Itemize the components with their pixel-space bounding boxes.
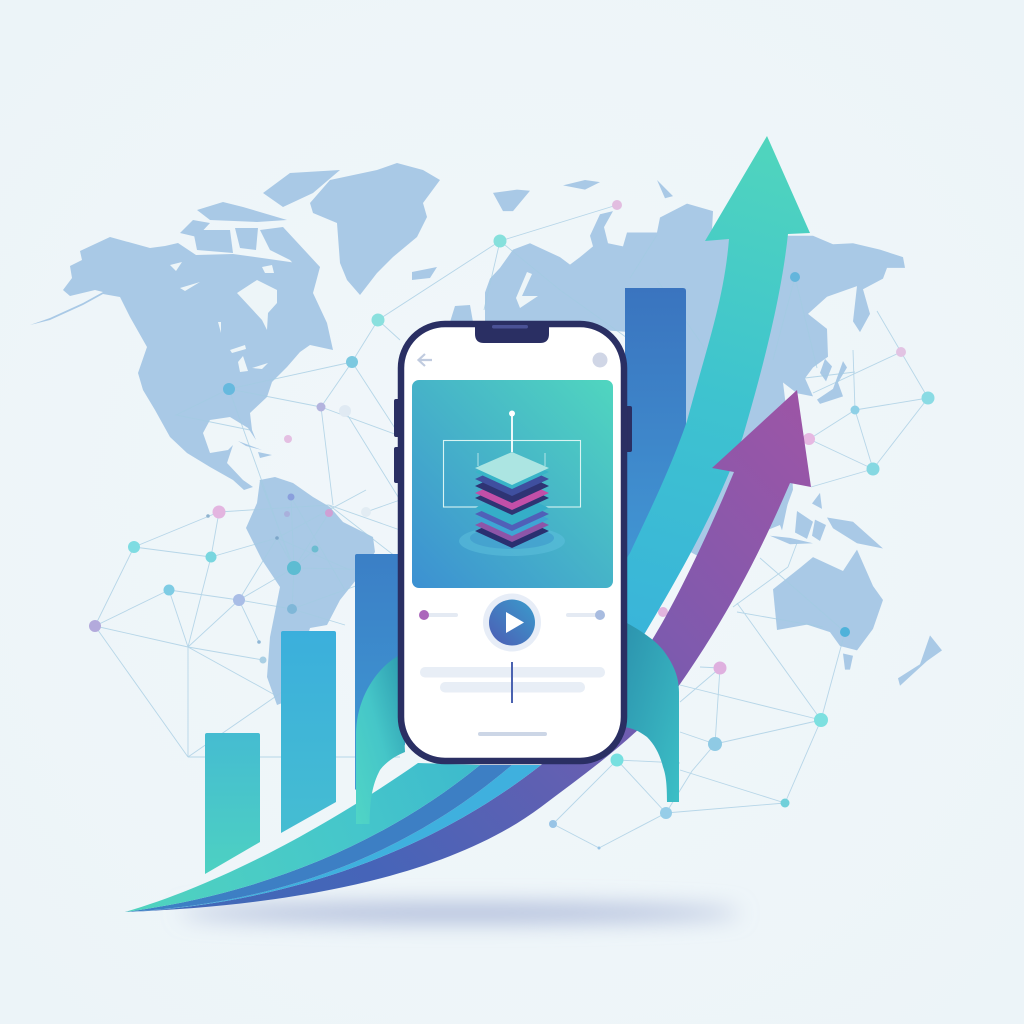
map: Iceland [412, 267, 437, 280]
profile avatar [592, 352, 608, 368]
media panel [412, 380, 613, 588]
bar 1 [205, 733, 260, 874]
left slider [419, 610, 458, 620]
phone notch [475, 324, 549, 343]
map: Hudson Bay, lakes and inland seas [170, 262, 538, 372]
stack layers [475, 452, 549, 548]
map: Australia [773, 550, 883, 670]
back arrow icon [418, 354, 432, 366]
bar 2 [281, 631, 336, 833]
growth arrow: light blue band [125, 765, 541, 912]
antenna [511, 413, 513, 452]
home indicator [478, 732, 547, 736]
phone side buttons [394, 399, 632, 483]
map: eastern hemisphere [485, 180, 942, 686]
map: North America [30, 237, 333, 490]
text placeholder bars [420, 662, 605, 703]
bar 4 [625, 288, 686, 590]
phone [394, 324, 632, 761]
map: New Zealand [898, 635, 942, 686]
growth arrow: teal swoosh [125, 763, 480, 912]
growth arrow: purple [125, 390, 811, 912]
map: Greenland [310, 163, 440, 295]
map: Japan and Korea [817, 359, 847, 404]
map: Caribbean islands [238, 441, 272, 458]
map: South America [246, 477, 375, 705]
play button [483, 594, 541, 652]
ground shadow [180, 904, 740, 922]
world map [30, 163, 942, 705]
bar 3 [355, 554, 405, 790]
layer stack illustration [444, 410, 580, 556]
rocket fin: left [356, 655, 405, 824]
phone speaker [492, 325, 528, 328]
map: Canadian Arctic islands [180, 170, 340, 282]
frame [444, 440, 580, 507]
network connections [95, 205, 928, 848]
map: Arctic islands of Eurasia [493, 180, 673, 211]
bar chart [205, 288, 686, 874]
phone body [401, 324, 624, 761]
network nodes [89, 200, 934, 850]
map: Europe and Asia [485, 204, 905, 557]
growth arrow: teal upper shaft and head [430, 136, 810, 755]
rocket fin: right [625, 622, 679, 802]
map: UK and near Europe [450, 305, 513, 322]
map: Southeast Asia and New Guinea [770, 493, 883, 549]
right slider [566, 610, 605, 620]
stack ripple [459, 526, 565, 556]
growth arrow: blue band [125, 765, 512, 912]
